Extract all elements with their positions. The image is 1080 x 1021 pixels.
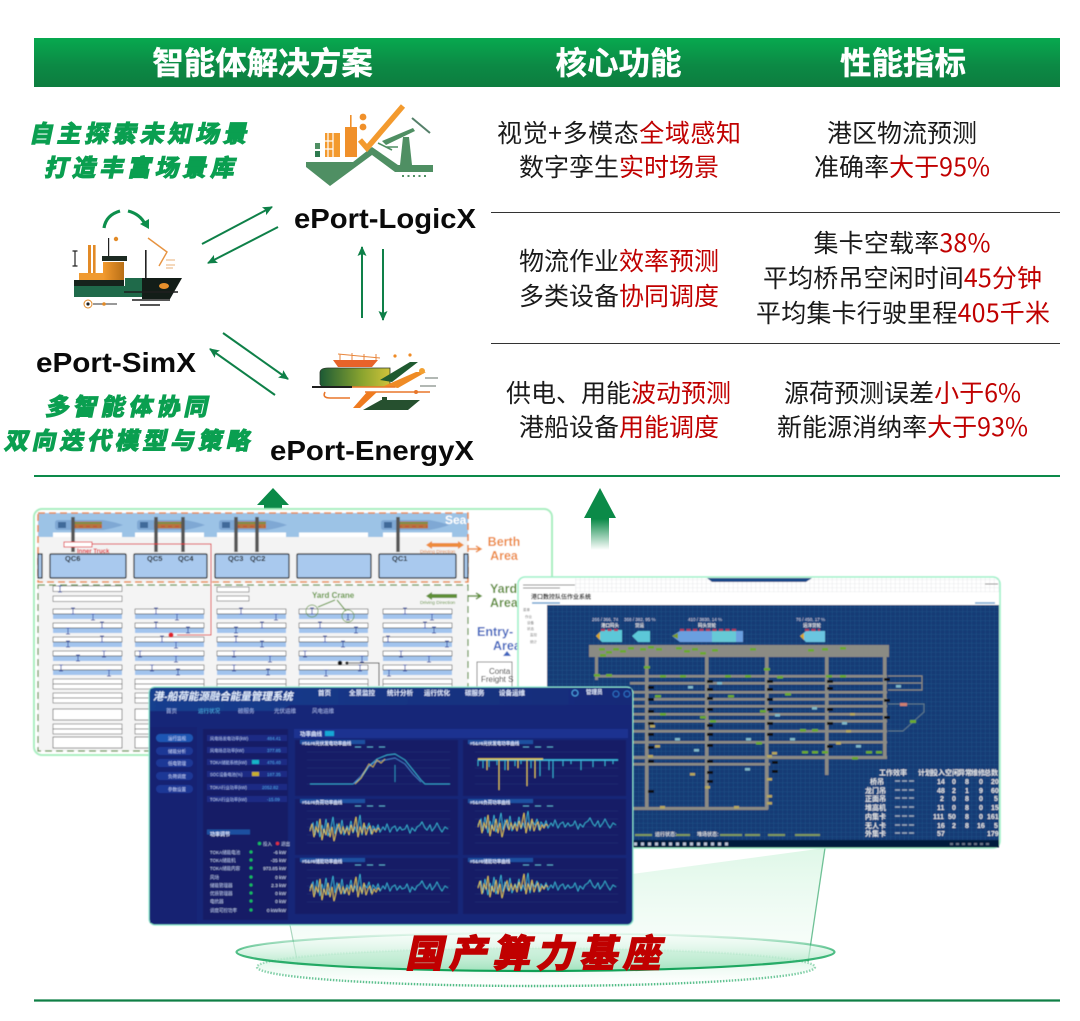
label: yard area: Area <box>490 596 519 610</box>
ships at berth: 368 / 382, 95 % <box>624 617 656 622</box>
equipment table: 正面吊 <box>865 795 886 803</box>
label: entry area: Area <box>493 639 522 653</box>
arrow: up to functions <box>584 488 616 550</box>
tabs: 光伏运维 <box>274 707 297 715</box>
middle status list: 476.40 <box>267 760 281 765</box>
middle status list: 风电场发电功率(kW) <box>210 735 249 742</box>
equipment table: 8 <box>965 805 969 812</box>
taskbar <box>547 840 999 848</box>
middle status list: TOKA行业功率(kW) <box>210 784 248 791</box>
sidebar menu: 低电管理 <box>168 760 186 767</box>
black outer truck route <box>338 661 379 686</box>
arrows: agent interactions <box>202 207 383 395</box>
equipment table: 48 <box>937 788 945 795</box>
ships at berth: 410 / 3830, 14 % <box>688 617 722 622</box>
label: berth area: Berth <box>488 535 520 549</box>
callout: multi-agent collaboration <box>3 394 258 455</box>
middle status list: TOKA储能机 <box>210 857 236 864</box>
middle status list: 2.3 kW <box>271 883 286 889</box>
sidebar menu: 运行监视 <box>168 735 186 742</box>
equipment table: 工作效率 <box>879 768 907 777</box>
middle status list: TOKA储能内容 <box>210 865 241 872</box>
row 3 text <box>506 374 1028 444</box>
top navigation: 设备运维 <box>499 688 526 697</box>
berth area: QC4 <box>178 554 194 563</box>
berth area: Inner Truck <box>77 549 110 555</box>
equipment table: 179 <box>987 831 999 838</box>
berth area: QC6 <box>65 554 80 563</box>
equipment table: 8 <box>965 814 969 821</box>
equipment table: 16 <box>977 823 985 830</box>
equipment table: 50 <box>948 814 956 821</box>
middle status list: -15.09 <box>267 797 280 802</box>
window title <box>523 578 999 603</box>
top navigation: 统计分析 <box>387 688 414 697</box>
chart: PV power curve: #5&#6光伏发电功率曲线 <box>302 740 352 747</box>
berth area: QC5 <box>147 554 162 563</box>
label: berth area: Area <box>490 549 519 563</box>
sidebar: 状态 <box>527 626 534 631</box>
ships at berth <box>592 617 825 642</box>
top navigation: 运行优化 <box>424 688 450 697</box>
equipment table: 2 <box>940 796 944 803</box>
middle status list: 投入 <box>263 840 272 848</box>
sidebar: 作业 <box>525 614 532 619</box>
row 3 text: 源荷预测误差小于6% <box>784 374 1021 410</box>
equipment table: 龙门吊 <box>865 786 886 795</box>
row 1 text: 港区物流预测 <box>827 114 977 150</box>
callout: autonomous exploration: 自主探索未知场景 <box>28 121 255 148</box>
equipment table: 5 <box>994 796 998 803</box>
equipment table: 总数 <box>984 768 998 777</box>
screenshot: port monitoring system <box>518 577 1000 848</box>
sidebar menu <box>150 727 197 923</box>
middle status list: 0 kW/kW <box>267 908 286 914</box>
equipment table: 1 <box>965 788 969 795</box>
row 2 text: 物流作业效率预测 <box>519 242 719 278</box>
chart: power curve row 2 right <box>463 799 626 855</box>
ships at berth: 76 / 450, 17 % <box>796 617 825 622</box>
label: entry area: Entry- <box>477 625 513 639</box>
chart: PV power curve <box>295 740 458 796</box>
middle status list: SOC设备电池(%) <box>210 771 243 778</box>
equipment table: 无人卡 <box>865 821 886 830</box>
berth area: QC2 <box>250 554 265 563</box>
equipment table: 空闲 <box>945 768 959 777</box>
equipment table: 2 <box>952 823 956 830</box>
equipment table: 8 <box>965 796 969 803</box>
berth area: Driving Direction <box>420 549 456 555</box>
sidebar menu: 参数设置 <box>168 786 186 793</box>
equipment table: 投入 <box>931 768 945 777</box>
row 2 text: 集卡空载率38% <box>814 224 990 260</box>
heading: metrics: 性能指标 <box>840 45 966 81</box>
equipment table: 0 <box>952 805 956 812</box>
callout: multi-agent collaboration: 多智能体协同 <box>44 394 216 421</box>
middle status list: 风电场总功率(kW) <box>210 747 245 754</box>
top navigation: 管理员 <box>586 688 603 696</box>
middle status list: 功率调节 <box>210 831 230 838</box>
terminal roads <box>589 645 924 810</box>
top navigation: 港-船荷能源融合能量管理系统 <box>152 690 295 703</box>
row 3 text: 供电、用能波动预测 <box>506 374 731 410</box>
middle status list: 退出 <box>281 840 290 848</box>
equipment table: 计划 <box>918 768 932 777</box>
chart: grid power curve <box>463 740 626 796</box>
sidebar menu: 储能分析 <box>168 748 186 755</box>
equipment table: 5 <box>994 823 998 830</box>
equipment table <box>865 768 999 838</box>
callout: autonomous exploration: 打造丰富场景库 <box>43 154 242 182</box>
berth area <box>38 513 468 583</box>
icon: SimX ship <box>72 211 182 308</box>
equipment table: 0 <box>952 779 956 786</box>
middle status list: 973.85 kW <box>263 866 286 872</box>
row 2 text <box>519 224 1050 330</box>
header bar <box>34 38 1060 87</box>
table rows: functions and metrics <box>491 114 1060 444</box>
middle status list: TOKA行业功率(kW) <box>210 796 248 803</box>
equipment table: 8 <box>965 779 969 786</box>
middle status list: 电抗器 <box>210 898 224 905</box>
equipment table: 11 <box>937 805 945 812</box>
icon: LogicX port and wind turbine <box>306 106 433 186</box>
equipment table: 0 <box>979 779 983 786</box>
callout: multi-agent collaboration: 双向迭代模型与策略 <box>3 428 258 455</box>
red inner truck route <box>64 542 211 638</box>
equipment table: 2 <box>952 788 956 795</box>
curves header: 功率曲线 <box>300 730 323 738</box>
yard area: Driving Direction <box>420 600 456 606</box>
middle status list: 187.35 <box>267 772 281 777</box>
middle status list: 2052.82 <box>262 785 279 790</box>
row 3 text: 新能源消纳率大于93% <box>777 408 1028 444</box>
equipment table: 桥吊 <box>870 777 884 786</box>
row 1 text <box>497 114 990 184</box>
chart: power curve row 3 left <box>295 858 458 914</box>
icon: EnergyX ship and circuit <box>312 353 438 410</box>
sidebar: 设备 <box>527 620 534 625</box>
tabs: 运行状况 <box>198 707 221 715</box>
equipment table: 16 <box>937 823 945 830</box>
sea band <box>38 513 468 538</box>
arrow: up to solution <box>257 488 289 510</box>
middle status list <box>203 729 290 920</box>
equipment table: 0 <box>952 796 956 803</box>
tabs: 风电运维 <box>312 707 335 715</box>
sidebar: 菜单 <box>523 607 530 612</box>
middle status list: -6 kW <box>273 850 286 856</box>
tabs: 碳服务 <box>238 707 255 715</box>
ships at berth: 货运 <box>635 622 644 629</box>
equipment table: 57 <box>937 831 945 838</box>
equipment table: 0 <box>979 814 983 821</box>
light beam <box>290 848 825 962</box>
top navigation: 全景监控 <box>349 688 376 697</box>
equipment table: 0 <box>979 796 983 803</box>
equipment table: 0 <box>979 805 983 812</box>
yard area <box>38 585 468 751</box>
row 2 text: 平均集卡行驶里程405千米 <box>756 294 1050 330</box>
middle status list: 377.85 <box>267 748 281 753</box>
tabs <box>166 707 335 715</box>
ships at berth: 远洋货轮 <box>803 622 821 629</box>
top navigation <box>150 688 632 711</box>
equipment table: 15 <box>991 805 999 812</box>
middle status list: 储能管理器 <box>210 882 233 889</box>
equipment table: 外集卡 <box>865 829 886 838</box>
middle status list: 484.41 <box>267 736 281 741</box>
sea band: Sea <box>445 513 467 527</box>
equipment table: 维修 <box>971 768 985 777</box>
top navigation: 碳服务 <box>465 688 485 697</box>
row 1 text: 准确率大于95% <box>814 148 990 184</box>
equipment table: 111 <box>933 814 944 821</box>
sidebar <box>523 607 538 644</box>
middle status list: 0 kW <box>275 891 286 897</box>
label: yard area: Yard <box>490 582 517 596</box>
row 3 text: 港船设备用能调度 <box>519 408 719 444</box>
label: domestic compute base: 国产算力基座 <box>402 923 675 979</box>
chart: power curve row 3 right <box>463 858 626 914</box>
yard area: Yard Crane <box>312 591 355 600</box>
row 1 text: 数字孪生实时场景 <box>519 148 719 184</box>
vehicle tags <box>594 646 916 809</box>
chart: power curve row 3 right: #5&#6储能功率曲线 <box>470 858 511 865</box>
row 1 text: 视觉+多模态全域感知 <box>497 114 741 150</box>
ships at berth: 码头货轮 <box>698 622 716 629</box>
chart: power curve row 2 left <box>295 799 458 855</box>
sidebar menu: 负荷调度 <box>168 773 186 780</box>
status legend: 运行状态: <box>655 831 677 838</box>
middle status list: TOKA储能电池 <box>210 849 241 856</box>
middle status list: 风场 <box>210 874 219 881</box>
equipment table: 堆高机 <box>865 803 886 812</box>
berth area: QC3 <box>228 554 243 563</box>
ships at berth: 266 / 366, 74 <box>592 617 619 622</box>
middle status list: 优质管理器 <box>210 890 233 897</box>
heading: solution: 智能体解决方案 <box>152 45 373 81</box>
middle status list: 0 kW <box>275 899 286 905</box>
screenshot: port-ship energy management system <box>149 687 633 925</box>
middle status list: -35 kW <box>271 858 286 864</box>
equipment table: 内集卡 <box>865 812 886 821</box>
status legend <box>635 831 820 838</box>
equipment table: 9 <box>979 788 983 795</box>
sidebar: 统计 <box>530 639 538 644</box>
middle status list: 0 kW <box>275 875 286 881</box>
equipment table: 60 <box>991 788 999 795</box>
equipment table: 异常 <box>958 768 972 777</box>
row 2 text: 平均桥吊空闲时间45分钟 <box>763 259 1042 295</box>
label: ePort-LogicX: ePort-LogicX <box>294 203 476 234</box>
curves header <box>294 729 628 738</box>
platform: upper disc <box>236 933 834 971</box>
chart: power curve row 3 left: #5&#6储能功率曲线 <box>302 858 343 865</box>
container freight station box <box>477 651 513 690</box>
top navigation: 首页 <box>318 688 332 697</box>
label: ePort-SimX: ePort-SimX <box>36 347 196 378</box>
middle status list: TOKA储能系统(kW) <box>210 759 248 766</box>
beam right edge <box>808 848 825 962</box>
row 2 text: 多类设备协同调度 <box>519 277 719 313</box>
chart: power curve row 2 left: #5&#6负荷功率曲线 <box>302 799 343 806</box>
heading: core functions: 核心功能 <box>555 45 682 81</box>
berth area: QC1 <box>392 554 407 563</box>
status legend: 堆场状态: <box>697 831 719 838</box>
callout: autonomous exploration <box>28 121 255 182</box>
sidebar: 监控 <box>530 632 538 637</box>
equipment table: 8 <box>965 823 969 830</box>
equipment table: 161 <box>987 814 999 821</box>
equipment table: 14 <box>937 779 945 786</box>
tabs: 首页 <box>166 707 178 715</box>
container freight station box: Freight S <box>481 675 513 684</box>
screenshot: yard layout diagram <box>34 509 552 755</box>
chart: grid power curve: #5&#6光伏发电功率曲线 <box>470 740 520 747</box>
equipment table: 20 <box>991 779 999 786</box>
middle status list: 调度可控功率 <box>210 907 237 914</box>
chart: power curve row 2 right: #5&#6负荷功率曲线 <box>470 799 511 806</box>
ships at berth: 港口码头 <box>601 622 619 629</box>
container freight station box: Conta <box>489 667 511 676</box>
window title: 港口数控队伍作业系统 <box>531 593 591 601</box>
platform: lower dotted ring <box>257 948 815 986</box>
map background <box>547 605 999 840</box>
label: ePort-EnergyX: ePort-EnergyX <box>270 435 474 466</box>
